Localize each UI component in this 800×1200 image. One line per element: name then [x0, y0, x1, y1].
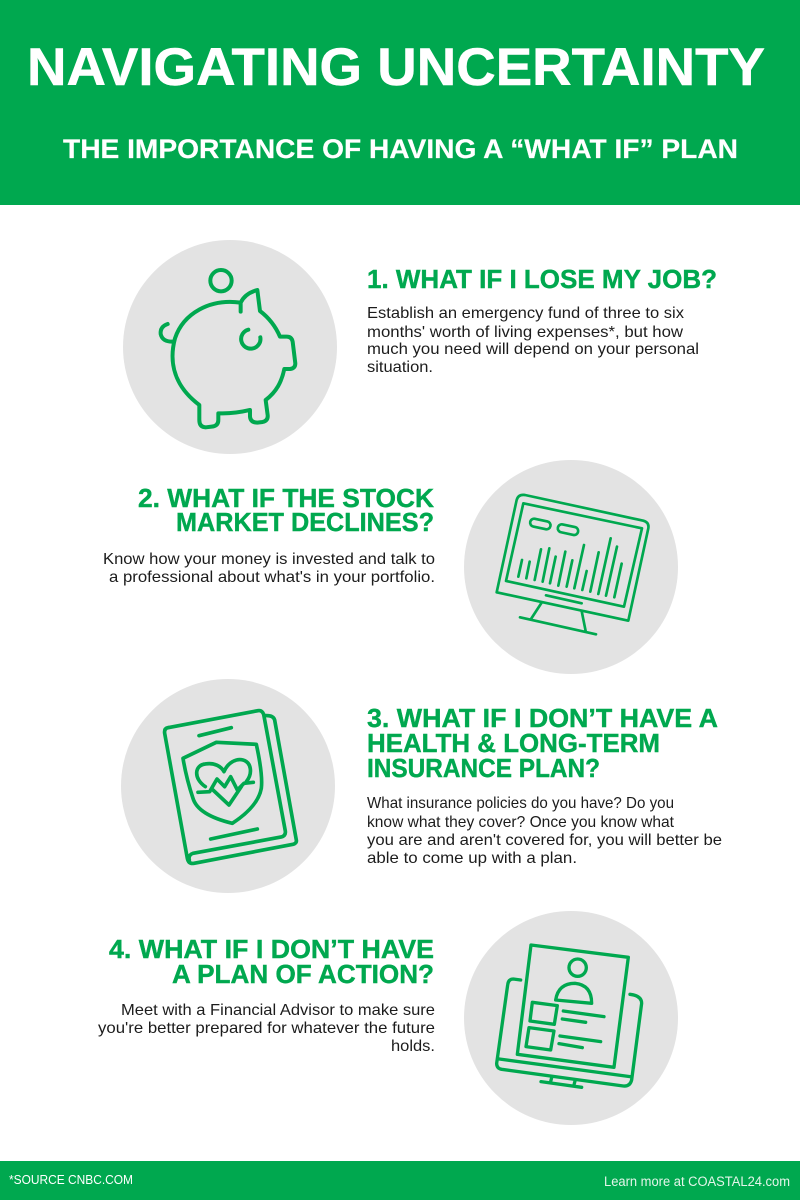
subtitle: THE IMPORTANCE OF HAVING A “WHAT IF” PLAN: [63, 134, 738, 164]
heading 3: [367, 705, 718, 783]
text block 3: What insurance policies do you have? Do you: [367, 795, 674, 812]
text block 1: [367, 305, 699, 376]
header banner: [0, 0, 800, 205]
text block 1: Establish an emergency fund of three to six: [367, 305, 684, 322]
text block 3: [367, 795, 722, 867]
text block 3: know what they cover? Once you know what: [367, 814, 675, 831]
learn more link text: Learn more at COASTAL24.com: [604, 1174, 790, 1189]
text block 3: you are and aren't covered for, you will better be: [367, 832, 722, 849]
heading 2: [138, 485, 435, 537]
heading 4: A PLAN OF ACTION?: [172, 961, 434, 989]
icon: monitor with bar chart: [464, 460, 678, 674]
heading 4: [109, 936, 434, 989]
section 1: lose my job: [123, 240, 717, 454]
heading 2: MARKET DECLINES?: [176, 509, 434, 537]
footer bar: [0, 1161, 800, 1200]
heading 1: 1. WHAT IF I LOSE MY JOB?: [367, 266, 717, 294]
section 3: insurance: [121, 679, 722, 893]
section 2: stock market: [103, 460, 678, 674]
text block 4: Meet with a Financial Advisor to make sure: [121, 1002, 435, 1019]
section 4: plan of action: [98, 911, 678, 1125]
text block 3: able to come up with a plan.: [367, 850, 577, 867]
heading 4: 4. WHAT IF I DON’T HAVE: [109, 936, 434, 964]
icon: insurance policy book with heart shield: [121, 679, 335, 893]
heading 3: HEALTH & LONG-TERM: [367, 730, 660, 758]
text block 4: [98, 1002, 435, 1055]
text block 1: much you need will depend on your personal: [367, 341, 699, 358]
icon: piggy bank: [123, 240, 337, 454]
text block 2: Know how your money is invested and talk to: [103, 551, 435, 568]
text block 1: months' worth of living expenses*, but how: [367, 324, 683, 341]
text block 4: holds.: [391, 1038, 435, 1055]
text block 2: a professional about what's in your portfolio.: [109, 569, 435, 586]
text block 1: situation.: [367, 359, 433, 376]
heading 2: 2. WHAT IF THE STOCK: [138, 485, 435, 513]
heading 3: 3. WHAT IF I DON’T HAVE A: [367, 705, 718, 733]
heading 3: INSURANCE PLAN?: [367, 755, 600, 783]
source note: *SOURCE CNBC.COM: [9, 1172, 133, 1187]
text block 4: you're better prepared for whatever the future: [98, 1020, 435, 1037]
icon: laptop with profile document: [464, 911, 678, 1125]
text block 2: [103, 551, 435, 586]
title: NAVIGATING UNCERTAINTY: [27, 38, 765, 97]
